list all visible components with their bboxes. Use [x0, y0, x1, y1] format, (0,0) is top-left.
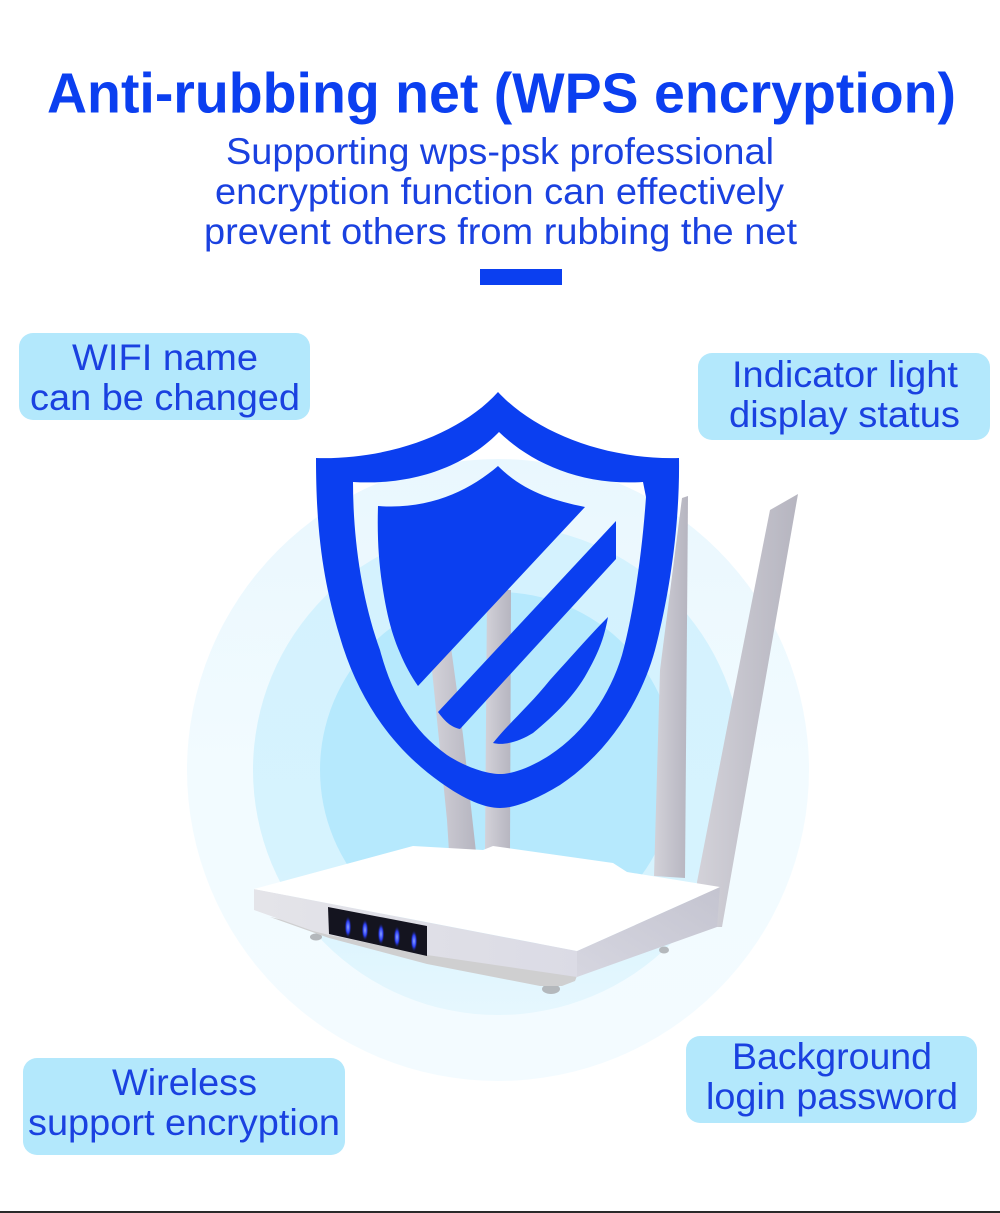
- callout: background password: login password: [706, 1075, 958, 1117]
- concentric signal circles: [187, 459, 809, 1081]
- callout: indicator light: [698, 353, 990, 440]
- callout: WIFI name: can be changed: [30, 376, 300, 418]
- callout: wireless encryption: support encryption: [28, 1101, 340, 1143]
- callout: indicator light: Indicator light: [732, 353, 959, 395]
- callout: indicator light: display status: [729, 393, 960, 435]
- callout: wireless encryption: Wireless: [112, 1061, 257, 1103]
- callout: WIFI name: WIFI name: [72, 336, 258, 378]
- heading accent bar: [480, 269, 562, 285]
- router front edge: [254, 889, 577, 977]
- router base: [270, 917, 577, 986]
- title: Anti-rubbing net (WPS encryption): [47, 62, 956, 126]
- subtitle text block: encryption function can effectively: [215, 170, 784, 212]
- subtitle text block: [204, 130, 798, 252]
- indicator panel: [328, 907, 427, 956]
- router top surface: [254, 846, 720, 951]
- subtitle text block: prevent others from rubbing the net: [204, 210, 798, 252]
- router side edge: [577, 887, 720, 977]
- callout: background password: Background: [732, 1035, 932, 1077]
- callout: background password: [686, 1035, 977, 1123]
- router body: [254, 846, 720, 994]
- callout: wireless encryption: [23, 1058, 345, 1155]
- router feet: [310, 934, 669, 994]
- callout: WIFI name: [19, 333, 310, 420]
- LED lights: [344, 916, 418, 952]
- icon: security shield: [316, 392, 679, 808]
- subtitle text block: Supporting wps-psk professional: [226, 130, 774, 172]
- router antennas: [431, 494, 798, 927]
- bottom edge line: [0, 1211, 1000, 1213]
